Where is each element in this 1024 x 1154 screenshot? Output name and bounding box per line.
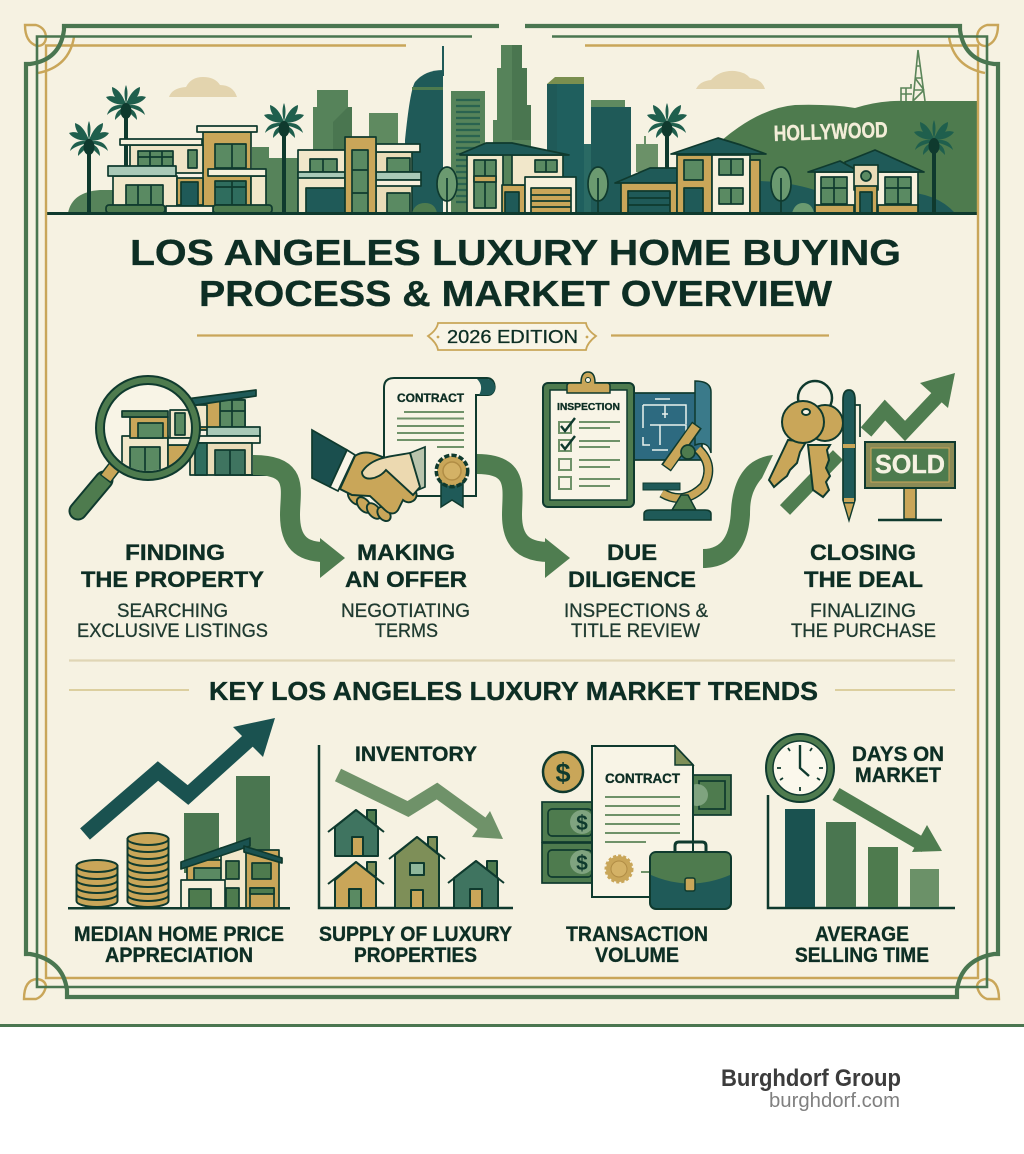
trend label 4: SELLING TIME	[795, 944, 929, 967]
villa 2	[298, 137, 421, 213]
icon: days on market: MARKET	[855, 764, 941, 787]
hollywood sign: HOLLYWOOD	[773, 117, 888, 146]
step 1 label: EXCLUSIVE LISTINGS	[77, 621, 268, 642]
step 3 label: INSPECTIONS &	[564, 601, 708, 622]
trend label 1: APPRECIATION	[105, 944, 253, 967]
step 3 label: DILIGENCE	[568, 567, 696, 592]
contract document: CONTRACT	[605, 770, 680, 786]
trend label 2: SUPPLY OF LUXURY	[319, 923, 512, 946]
trend label 3: VOLUME	[595, 944, 679, 967]
step 2 label: AN OFFER	[345, 567, 467, 592]
step 1 label: SEARCHING	[117, 601, 228, 622]
step 1 label	[77, 540, 268, 642]
trend label 2	[319, 923, 512, 967]
arrow: step 1 to 2	[253, 465, 345, 578]
bush 2	[792, 203, 814, 213]
icon: price appreciation chart	[68, 718, 290, 910]
step 4 label: FINALIZING	[810, 601, 916, 622]
step 3 label: TITLE REVIEW	[571, 621, 700, 642]
step 4 label: THE DEAL	[804, 567, 923, 592]
step 3 label: DUE	[607, 540, 657, 565]
title: LOS ANGELES LUXURY HOME BUYING	[130, 232, 901, 273]
icon: transaction volume	[542, 746, 731, 909]
footer brand	[721, 1065, 901, 1112]
trend label 3: TRANSACTION	[566, 923, 708, 946]
clock	[766, 734, 834, 802]
background low building and hill	[68, 147, 302, 213]
step 4 label	[791, 540, 936, 642]
contract document	[592, 746, 693, 897]
bush 1	[412, 203, 437, 213]
banknotes: $	[576, 852, 588, 875]
trend label 3	[566, 923, 708, 967]
edition badge	[197, 323, 829, 350]
downtown towers	[313, 45, 658, 213]
icon: contract and handshake: CONTRACT	[397, 391, 465, 405]
coin: $	[555, 758, 571, 788]
house 5	[808, 150, 924, 213]
trend label 4	[795, 923, 929, 967]
step 2 label: TERMS	[375, 621, 438, 642]
skyline illustration	[47, 45, 977, 215]
icon: magnifier over house	[78, 380, 268, 511]
ground line	[47, 212, 977, 215]
step 1 label: FINDING	[125, 540, 225, 565]
icon: inspection clipboard, blueprint, microscope	[543, 372, 711, 520]
footer brand: Burghdorf Group	[721, 1065, 901, 1092]
arrow: step 2 to 3	[477, 464, 570, 578]
tree 3	[771, 167, 791, 213]
briefcase	[650, 842, 731, 909]
tree 1	[437, 167, 457, 213]
cloud right	[696, 71, 765, 89]
step 3 label	[564, 540, 708, 642]
title: PROCESS & MARKET OVERVIEW	[199, 273, 832, 314]
edition badge: 2026 EDITION	[447, 327, 578, 347]
tree 2	[588, 167, 608, 213]
step 2 label: MAKING	[357, 540, 455, 565]
banknotes	[542, 775, 731, 883]
icon: contract and handshake	[312, 378, 495, 524]
icon: inspection clipboard, blueprint, microscope: INSPECTION	[557, 401, 620, 413]
arrow: step 3 to 4	[703, 455, 773, 568]
radio tower	[901, 50, 925, 101]
Hollywood hill	[722, 101, 977, 213]
step 4 label: THE PURCHASE	[791, 621, 936, 642]
step 4 label: CLOSING	[810, 540, 916, 565]
icon: inventory chart: INVENTORY	[355, 743, 477, 766]
icon: days on market: DAYS ON	[852, 743, 944, 766]
coin	[543, 752, 583, 792]
trend label 4: AVERAGE	[815, 923, 909, 946]
trend label 2: PROPERTIES	[354, 944, 477, 967]
icon: keys, pen, rising arrow, sold sign	[769, 373, 955, 520]
step 2 label	[341, 540, 470, 642]
house 3	[460, 143, 576, 213]
footer brand: burghdorf.com	[769, 1090, 900, 1112]
trend label 1	[74, 923, 284, 967]
banknotes: $	[576, 812, 588, 835]
icon: keys, pen, rising arrow, sold sign: SOLD	[875, 449, 945, 479]
cloud left	[169, 77, 237, 97]
section heading: market trends: KEY LOS ANGELES LUXURY MARKET TRENDS	[209, 676, 818, 706]
footer band	[0, 1024, 1024, 1154]
step 2 label: NEGOTIATING	[341, 601, 470, 622]
icon: inventory chart	[319, 743, 513, 908]
trend label 1: MEDIAN HOME PRICE	[74, 923, 284, 946]
step 1 label: THE PROPERTY	[81, 567, 264, 592]
title	[130, 232, 901, 314]
house 4	[615, 138, 766, 213]
villa 1	[106, 126, 272, 213]
palm trees	[69, 85, 954, 213]
icon: days on market	[766, 734, 955, 908]
teal foothill	[760, 181, 955, 213]
